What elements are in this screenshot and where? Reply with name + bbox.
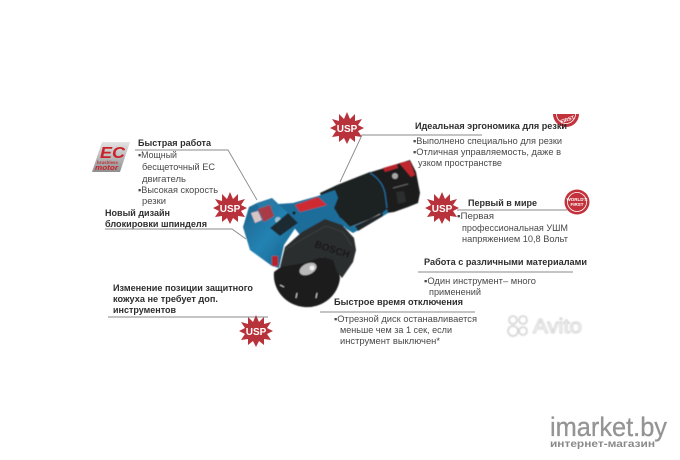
callout: world first: Первый в мире [468,198,537,209]
callout: fast stop time: меньше чем за 1 сек, если [340,325,452,336]
icon: EC brushless motor badge: motor [95,165,119,172]
icon: world's first badge [564,190,590,214]
icon: USP star right: USP [432,204,453,215]
icon: EC brushless motor badge [92,142,130,172]
callout: various materials [418,257,587,298]
callout: ergonomics: ▪Выполнено специально для резки [413,136,562,147]
callout: fast operation: ▪Мощный [138,150,177,161]
callout: fast operation: Быстрая работа [138,138,212,149]
callout: fast stop time [320,297,477,347]
callout: guard adjustment: Изменение позиции защитного [113,283,253,294]
callout: guard adjustment [108,283,268,317]
callout: various materials: ▪Один инструмент– много [424,276,536,287]
icon: USP star bottom: USP [246,327,267,338]
callout: ergonomics: узком пространстве [418,158,502,169]
illustration: angle grinder [243,160,420,307]
icon: red round badge clipped at top [553,114,579,127]
callout: ergonomics: ▪Отличная управляемость, даже в [413,147,561,158]
watermark: imarket.by logo: интернет-магазин [550,438,655,450]
callout: guard adjustment: инструментов [113,305,176,316]
callout: world first: напряжением 10,8 Вольт [462,234,569,245]
callout: world first [457,198,569,245]
motor head [243,198,298,268]
callout: fast operation: ▪Высокая скорость [138,185,218,196]
icon: EC brushless motor badge: EC [100,145,125,162]
callout: world first: профессиональная УШМ [462,223,568,234]
callout: spindle lock: блокировки шпинделя [105,219,207,230]
callout: fast operation [135,138,257,207]
callout: various materials: Работа с различными материалами [424,257,587,268]
icon: USP star left: USP [220,204,241,215]
battery [368,160,420,214]
icon: USP star top [330,112,364,144]
cutting disc [274,256,340,307]
callout: fast operation: бесщеточный ЕС [142,162,215,173]
callout: fast stop time: инструмент выключен* [340,336,440,347]
protective guard [280,219,356,278]
icon: USP star right [425,192,459,224]
icon: USP star left [213,192,247,224]
callout: spindle lock: Новый дизайн [105,208,170,219]
callout: fast stop time: Быстрое время отключения [334,297,463,308]
callout: fast operation: резки [142,196,166,207]
callout: ergonomics [340,121,567,182]
callout: fast stop time: ▪Отрезной диск останавливается [334,314,477,325]
handle [320,172,388,233]
protective guard: BOSCH [313,239,351,261]
icon: red round badge clipped at top: FIRST [560,115,575,125]
watermark: Avito [508,316,582,338]
callout: various materials: применений [429,287,481,298]
watermark: Avito: Avito [533,316,582,338]
watermark: imarket.by logo: imarket.by [550,412,667,442]
icon: EC brushless motor badge: brushless [97,160,118,165]
callout: fast operation: двигатель [142,174,186,185]
icon: world's first badge: FIRST [570,202,584,207]
callout: world first: ▪Первая [457,211,494,222]
neck and trigger switch [278,190,345,240]
icon: USP star bottom [239,315,273,347]
callout: spindle lock [105,208,246,239]
icon: USP star top: USP [337,124,358,135]
icon: world's first badge: WORLD'S [566,197,588,202]
callout: ergonomics: Идеальная эргономика для резки [415,121,567,132]
callout: guard adjustment: кожуха не требует доп. [113,294,218,305]
